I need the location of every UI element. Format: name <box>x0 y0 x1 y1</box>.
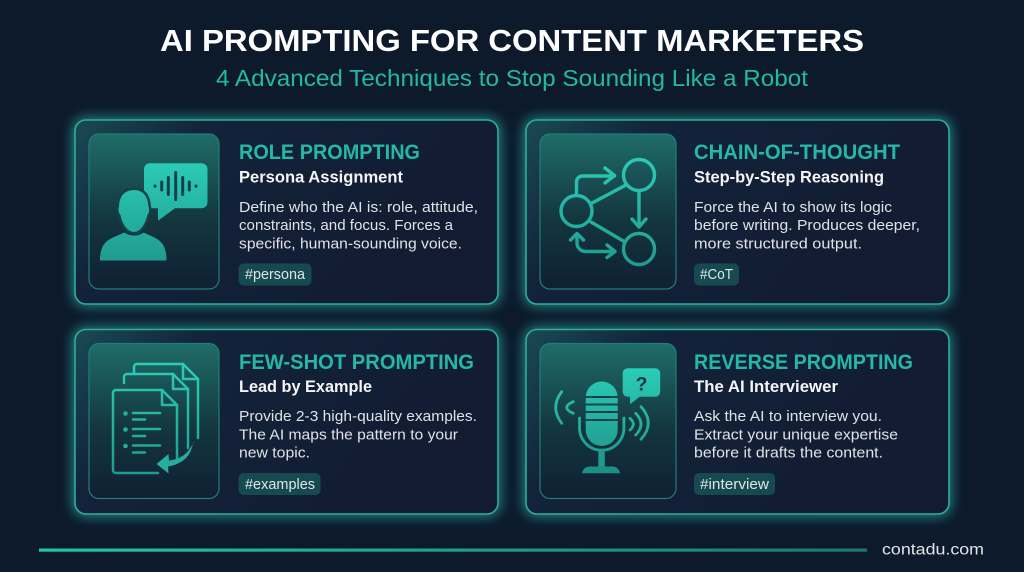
text block: constraints, and focus. Forces a <box>239 217 454 234</box>
heading: REVERSE PROMPTING <box>694 351 913 374</box>
subheading: Persona Assignment <box>239 168 403 186</box>
icon: stacked documents <box>113 364 198 474</box>
icon: microphone with question bubble: ? <box>636 374 647 396</box>
tag: #CoT <box>700 267 733 283</box>
icon: person with speech bubble <box>100 163 208 260</box>
tag: #examples <box>245 477 315 493</box>
text block: before writing. Produces deeper, <box>694 217 920 234</box>
tag: #persona <box>245 267 306 283</box>
text block <box>694 199 920 252</box>
tag <box>694 473 775 495</box>
subheading: Step-by-Step Reasoning <box>694 168 884 186</box>
title: AI PROMPTING FOR CONTENT MARKETERS <box>160 23 864 58</box>
text block: The AI maps the pattern to your <box>239 426 458 444</box>
subtitle: 4 Advanced Techniques to Stop Sounding Like a Robot <box>216 65 809 91</box>
text block: before it drafts the content. <box>694 444 883 462</box>
text block: new topic. <box>239 444 310 462</box>
heading: CHAIN-OF-THOUGHT <box>694 141 900 164</box>
panel: role prompting <box>73 118 500 306</box>
tag <box>238 473 320 495</box>
text block: Force the AI to show its logic <box>694 199 893 216</box>
text block <box>694 408 898 462</box>
text block: Ask the AI to interview you. <box>694 408 882 425</box>
heading: FEW-SHOT PROMPTING <box>239 351 474 374</box>
panel: reverse prompting <box>524 328 951 516</box>
panel: few-shot prompting <box>73 328 500 516</box>
text block: Extract your unique expertise <box>694 426 898 444</box>
tag: #interview <box>700 477 770 493</box>
tag <box>238 264 312 286</box>
heading: ROLE PROMPTING <box>239 141 420 164</box>
footer rule <box>39 548 867 552</box>
subheading: Lead by Example <box>239 377 372 396</box>
footer brand: contadu.com <box>882 542 984 558</box>
text block: Provide 2-3 high-quality examples. <box>239 408 477 425</box>
icon: microphone with question bubble <box>556 368 660 473</box>
text block: more structured output. <box>694 236 862 252</box>
tag <box>694 264 739 286</box>
panel: chain-of-thought <box>524 118 951 306</box>
subheading: The AI Interviewer <box>694 377 838 396</box>
text block: specific, human-sounding voice. <box>239 236 462 252</box>
text block <box>239 199 478 252</box>
icon: reasoning graph <box>561 160 654 264</box>
text block <box>239 408 477 462</box>
text block: Define who the AI is: role, attitude, <box>239 199 478 216</box>
